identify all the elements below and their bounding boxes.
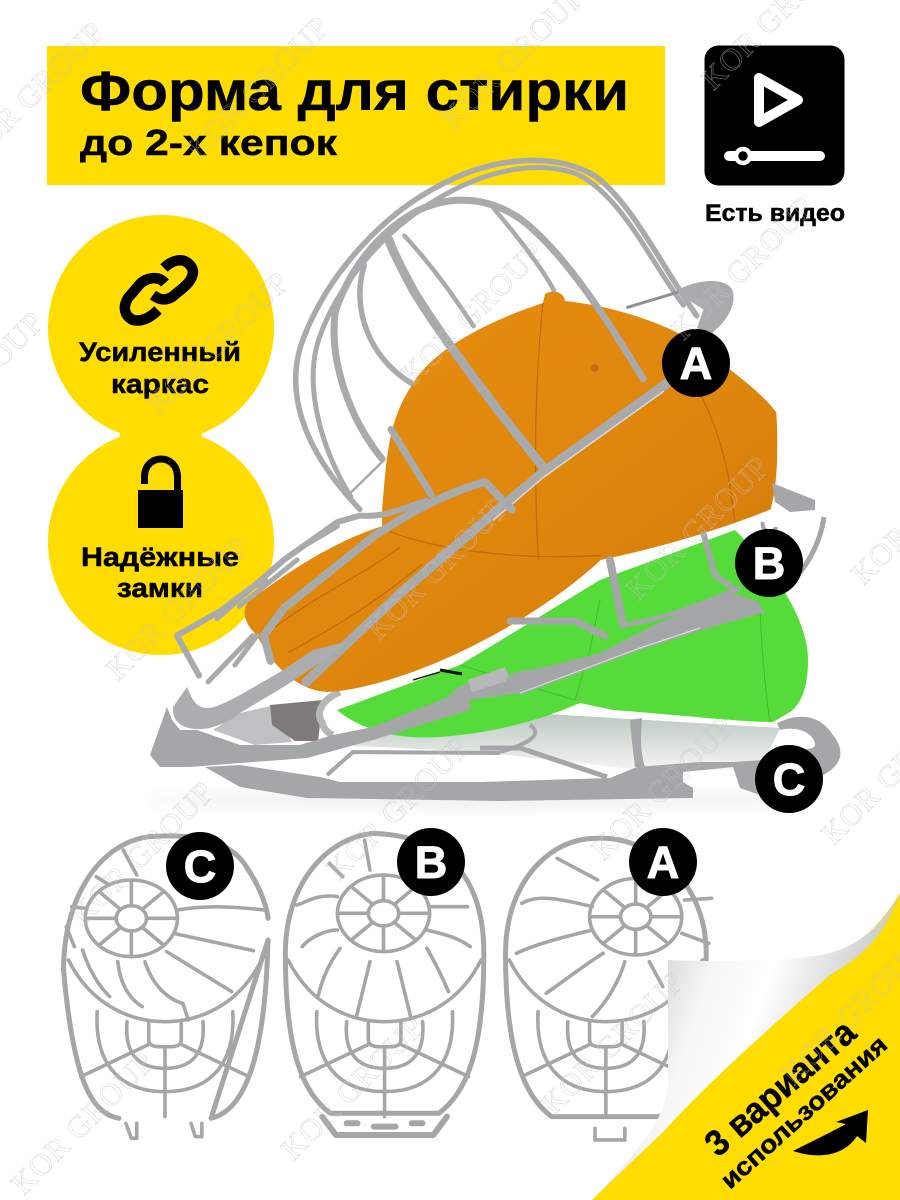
feature text: reliable locks: Надёжные <box>81 542 239 572</box>
corner text line 1: 3 варианта <box>696 1010 864 1164</box>
lower cage A <box>506 838 712 1140</box>
badge C top <box>755 745 823 813</box>
feet <box>126 1123 202 1138</box>
corner text line 2: использования <box>715 1030 893 1194</box>
label badges <box>166 329 823 900</box>
watermark: KOR GROUP <box>319 729 476 886</box>
orange cap <box>245 291 777 692</box>
watermark: KOR GROUP <box>359 489 516 646</box>
bottom tab <box>322 1117 447 1135</box>
badge C lower <box>166 832 234 900</box>
badge B lower: B <box>415 837 447 888</box>
watermark: KOR GROUP <box>584 709 741 866</box>
outline <box>506 838 706 1117</box>
hub wheel <box>337 875 430 952</box>
video badge <box>704 46 845 227</box>
outline <box>64 836 268 1118</box>
corner page curl <box>592 893 900 1200</box>
icon: slider <box>729 149 820 163</box>
icon: play <box>759 78 798 122</box>
watermark: KOR GROUP <box>179 9 336 166</box>
watermark: KOR GROUP <box>64 774 221 931</box>
badge A lower: A <box>647 837 679 888</box>
hub wheel <box>85 880 177 957</box>
lower cage B <box>285 833 484 1135</box>
feature text: reinforced frame: Усиленный <box>79 337 241 367</box>
badge C lower: C <box>184 841 216 892</box>
title banner <box>47 46 665 185</box>
badge A top: A <box>680 338 712 389</box>
badge C top: C <box>773 754 805 805</box>
watermark: KOR GROUP <box>139 264 296 421</box>
video caption: Есть видео <box>705 200 845 227</box>
watermark: KOR GROUP <box>534 964 691 1121</box>
icon: chain link <box>125 260 193 321</box>
badge B top <box>735 529 803 597</box>
icon: padlock <box>138 459 183 528</box>
spokes <box>66 850 264 1020</box>
watermark: KOR GROUP <box>4 1044 161 1200</box>
frame B rim <box>150 483 824 767</box>
watermark: KOR GROUP <box>274 1009 431 1166</box>
frame A lower ring <box>173 640 353 729</box>
bottom tab <box>595 1128 625 1140</box>
frame C base <box>205 692 840 801</box>
hub wheel <box>590 878 682 955</box>
title heading: Форма для стирки <box>80 59 629 122</box>
subtitle: до 2-х кепок <box>80 122 338 163</box>
watermark: KOR GROUP <box>394 234 551 391</box>
curled page back <box>592 893 900 1200</box>
yellow corner <box>592 893 900 1200</box>
badge B lower <box>397 828 465 896</box>
green cap <box>337 530 808 738</box>
badge A lower <box>629 828 697 896</box>
badge A top <box>662 329 730 397</box>
frame A cage <box>177 160 734 682</box>
lower cage C <box>64 836 268 1138</box>
watermark: KOR GROUP <box>619 449 776 606</box>
badge B top: B <box>753 538 785 589</box>
arrow <box>793 1110 868 1155</box>
feature circles <box>48 215 274 655</box>
feature circles: замки <box>117 573 203 603</box>
shadow under frames <box>140 792 820 808</box>
watermark: KOR GROUP <box>99 529 256 686</box>
feature circles: каркас <box>111 369 209 399</box>
outline <box>285 833 484 1113</box>
watermark: KOR GROUP <box>664 189 821 346</box>
